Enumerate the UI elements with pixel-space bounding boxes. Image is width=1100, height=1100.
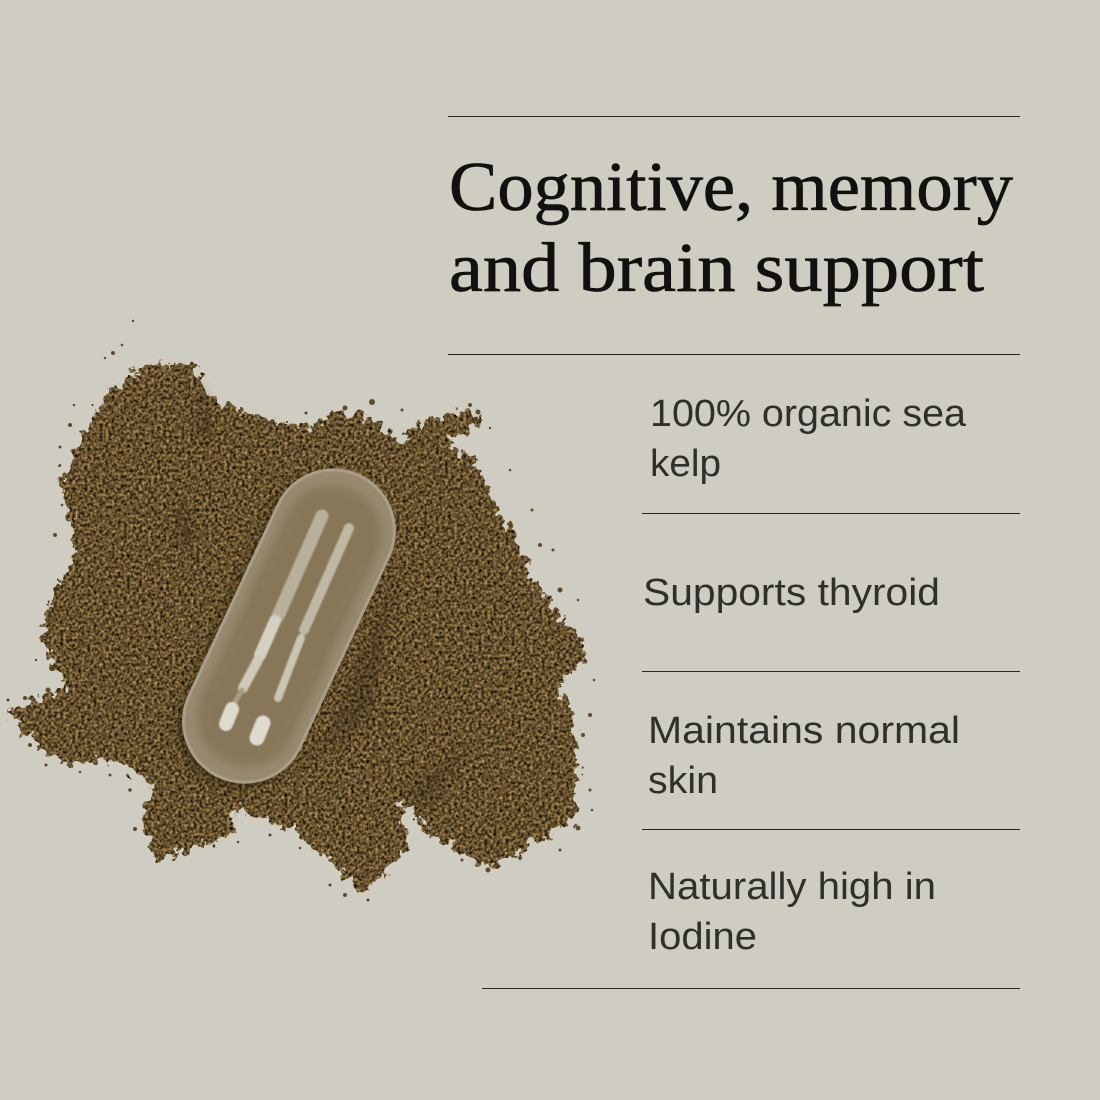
benefit: organic sea kelp bbox=[650, 393, 967, 485]
rule: under title bbox=[448, 354, 1020, 355]
rule: benefit 3 bbox=[642, 829, 1020, 830]
rule: benefit 1 bbox=[642, 513, 1020, 514]
powder mass bbox=[8, 362, 589, 894]
capsule reflections bbox=[226, 516, 349, 738]
title bbox=[449, 149, 1013, 307]
benefit: organic sea kelp: kelp bbox=[650, 443, 721, 485]
title: Cognitive, memory bbox=[449, 149, 1013, 226]
powder shading bbox=[170, 380, 470, 810]
powder pile bbox=[6, 320, 595, 902]
benefit: iodine bbox=[648, 866, 936, 958]
rule: bottom bbox=[482, 988, 1020, 989]
capsule shadow bbox=[157, 452, 411, 808]
benefit: thyroid: Supports thyroid bbox=[643, 572, 940, 614]
capsule shell bbox=[162, 448, 416, 804]
benefit: skin: Maintains normal bbox=[648, 710, 960, 752]
benefit: skin: skin bbox=[648, 760, 718, 802]
powder crumbs bbox=[6, 320, 595, 902]
benefit: skin bbox=[648, 710, 960, 802]
benefit: organic sea kelp: 100% organic sea bbox=[650, 393, 967, 435]
capsule bbox=[157, 448, 416, 808]
rule: top bbox=[448, 116, 1020, 117]
rule: benefit 2 bbox=[642, 671, 1020, 672]
benefit: iodine: Iodine bbox=[648, 916, 757, 958]
title: and brain support bbox=[449, 230, 985, 307]
benefit: iodine: Naturally high in bbox=[648, 866, 936, 908]
